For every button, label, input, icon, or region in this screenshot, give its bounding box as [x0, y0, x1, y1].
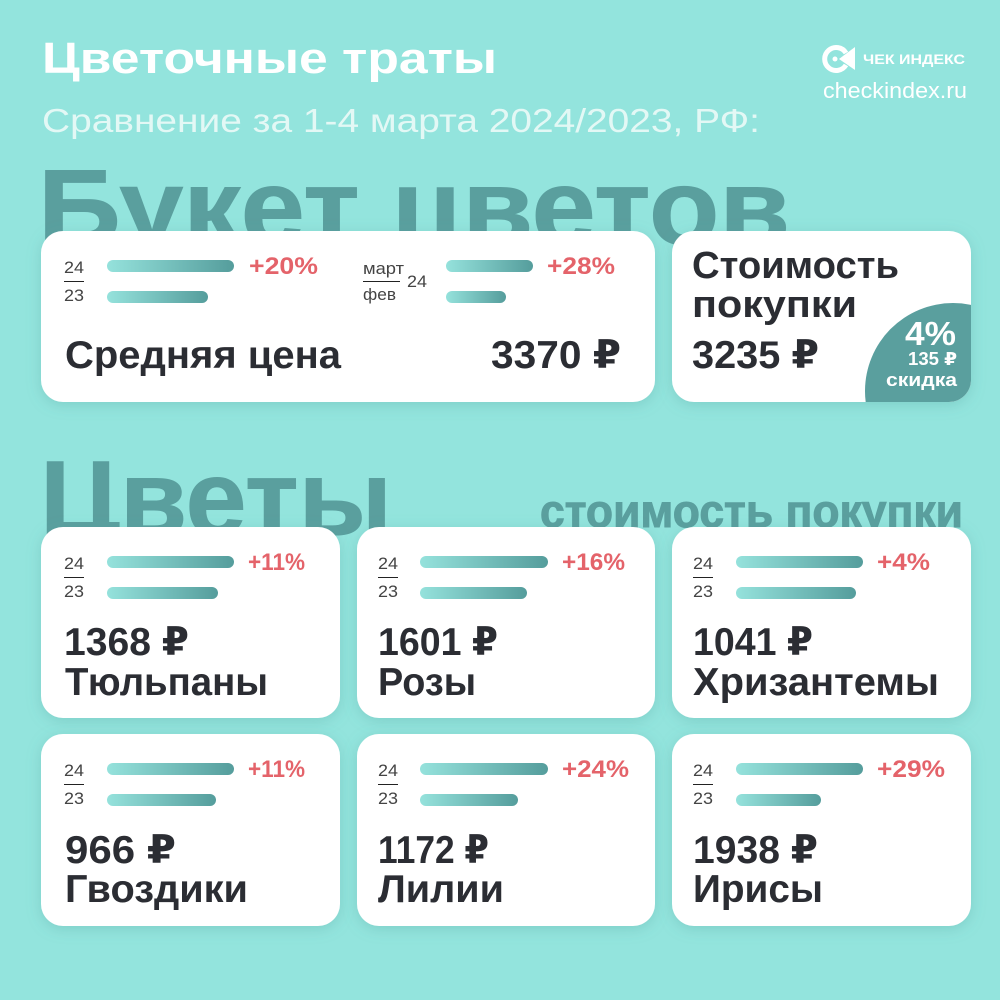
heading: стоимость покупки: стоимость покупки: [540, 485, 963, 537]
value: 3235 ₽: [692, 334, 819, 377]
price: 1938 ₽: [693, 829, 818, 872]
month labels: [363, 259, 427, 304]
year labels: 23: [693, 582, 713, 601]
year labels: 23: [378, 789, 398, 808]
panel: гвоздики: [41, 734, 340, 926]
website: checkindex.ru: [823, 78, 967, 103]
label: Средняя цена: [65, 334, 341, 377]
label line 2: покупки: [692, 284, 857, 326]
heading: Букет цветов: Букет цветов: [38, 147, 790, 267]
change: +11%: [248, 549, 305, 576]
year labels: 24: [378, 554, 398, 573]
price: 1368 ₽: [64, 621, 189, 664]
change: +29%: [877, 756, 945, 783]
year labels: 23: [64, 286, 84, 305]
heading: Цветы: Цветы: [40, 438, 392, 558]
bars март/фев: [446, 260, 533, 303]
bars: [736, 763, 863, 806]
year labels: [693, 554, 713, 601]
name: Лилии: [378, 868, 504, 911]
price: 966 ₽: [65, 829, 176, 872]
price: 1601 ₽: [378, 621, 498, 664]
bars: [736, 556, 863, 599]
bars: [420, 556, 548, 599]
year labels: 23: [64, 789, 84, 808]
year labels: 24: [64, 258, 84, 277]
month labels: фев: [363, 285, 396, 304]
panel: тюльпаны: [41, 527, 340, 718]
month labels: март: [363, 259, 404, 278]
name: Тюльпаны: [65, 661, 268, 704]
year labels: 24: [64, 554, 84, 573]
panel: лилии: [357, 734, 655, 926]
month labels: 24: [407, 272, 427, 291]
year labels: [64, 761, 84, 808]
change: +11%: [248, 756, 305, 783]
discount amount: 135 ₽: [908, 349, 957, 369]
name: Розы: [378, 661, 476, 704]
panel: хризантемы: [672, 527, 971, 718]
panel: средняя цена: [41, 231, 655, 402]
change +28%: +28%: [547, 253, 615, 280]
year labels: [378, 554, 398, 601]
discount badge: [865, 303, 971, 402]
bars: [107, 763, 234, 806]
year labels: 23: [693, 789, 713, 808]
change +20%: +20%: [249, 253, 318, 280]
year labels: 24: [378, 761, 398, 780]
discount label: скидка: [886, 370, 958, 390]
year labels: [378, 761, 398, 808]
value: 3370 ₽: [491, 334, 621, 377]
bars 24/23: [107, 260, 234, 303]
year labels: [64, 554, 84, 601]
panel: стоимость покупки: [670, 231, 973, 407]
panel: ирисы: [672, 734, 971, 926]
year labels: 24: [64, 761, 84, 780]
year labels: [693, 761, 713, 808]
price: 1041 ₽: [693, 621, 813, 664]
year labels: 24: [693, 554, 713, 573]
label: Стоимость: [692, 245, 899, 287]
title: Цветочные траты: [42, 34, 497, 83]
change: +24%: [562, 756, 629, 783]
subtitle: Сравнение за 1-4 марта 2024/2023, РФ:: [42, 102, 760, 139]
logo: Чек Индекс: [825, 47, 965, 71]
discount percent: 4%: [905, 315, 956, 352]
logo wordmark: ЧЕК ИНДЕКС: [863, 51, 965, 67]
year labels: 24: [693, 761, 713, 780]
year labels: 23: [378, 582, 398, 601]
name: Хризантемы: [693, 661, 939, 704]
panel: розы: [357, 527, 655, 718]
year labels: [64, 258, 84, 305]
icon: logo mark: [825, 47, 855, 71]
change: +4%: [877, 549, 930, 576]
price: 1172 ₽: [378, 829, 489, 872]
bars: [107, 556, 234, 599]
name: Ирисы: [693, 868, 823, 911]
change: +16%: [562, 549, 625, 576]
year labels: 23: [64, 582, 84, 601]
name: Гвоздики: [65, 868, 248, 911]
bars: [420, 763, 548, 806]
